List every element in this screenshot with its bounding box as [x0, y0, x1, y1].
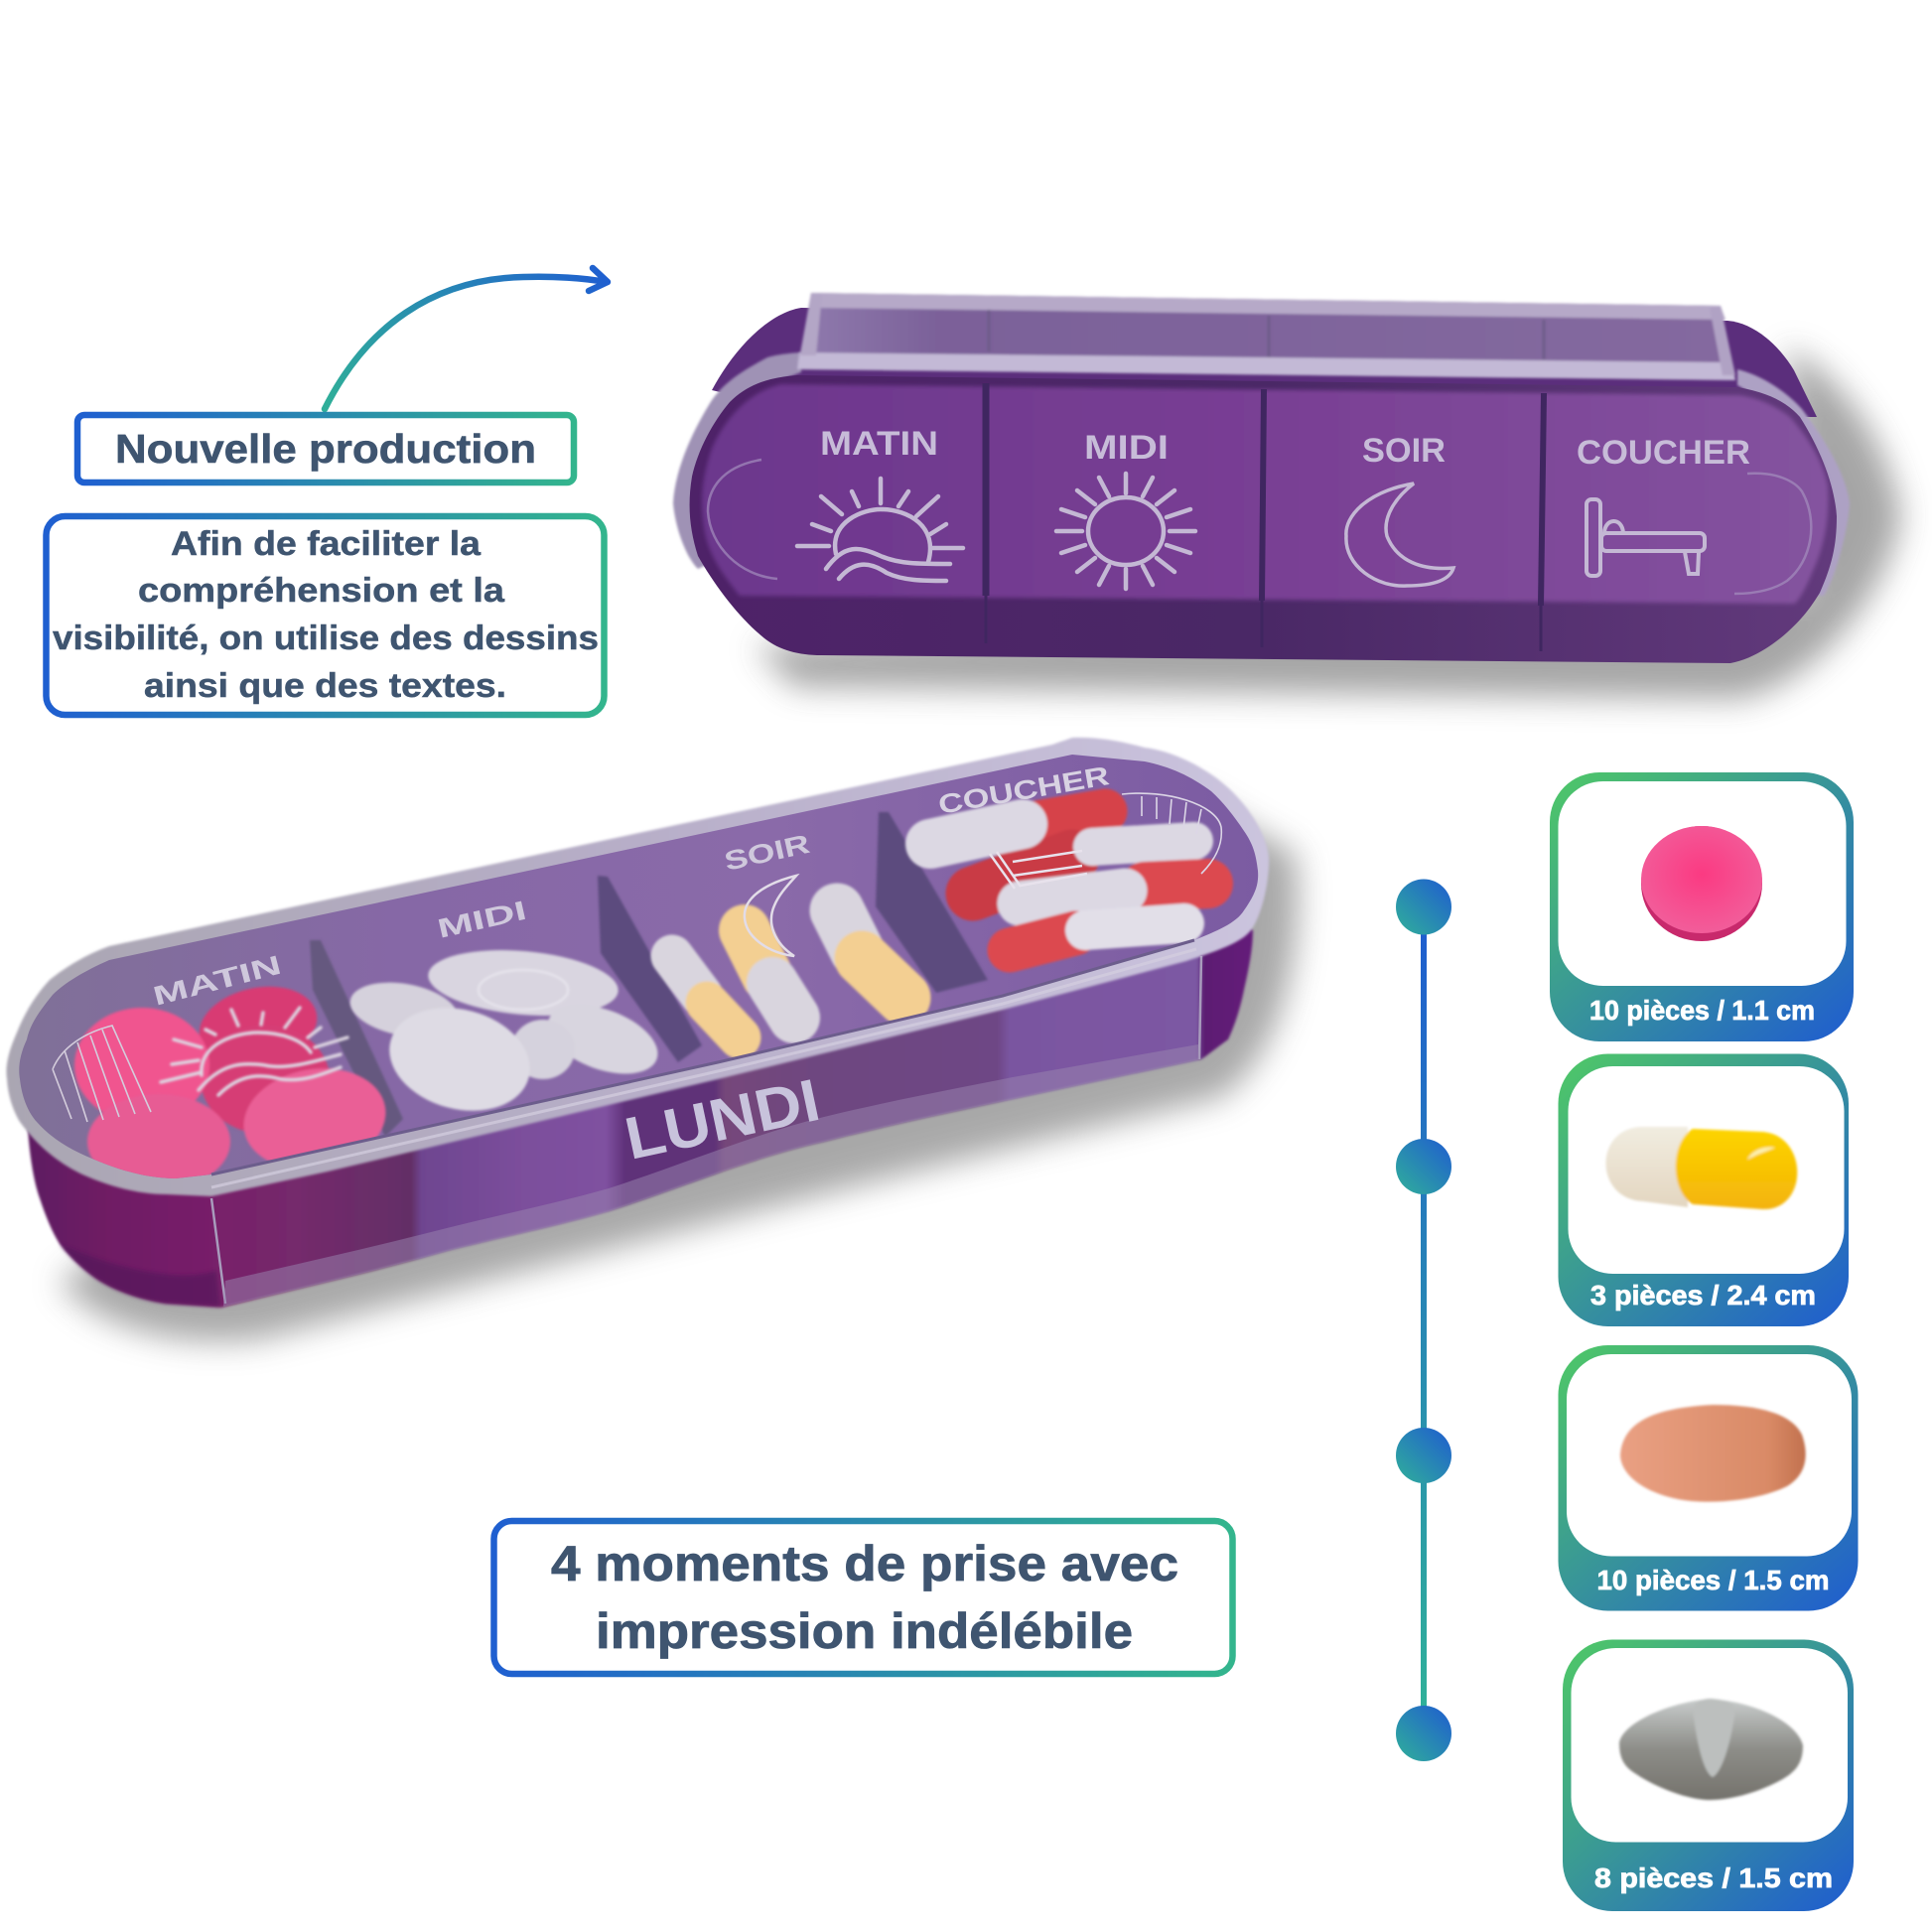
product photo: closed pill organizer: [673, 293, 1901, 699]
comb hatching right: [1122, 793, 1221, 874]
right rim: [1737, 369, 1850, 596]
yellow and white capsules: [672, 910, 903, 1037]
icon: bed: [1587, 499, 1705, 576]
pink tablet image: [1641, 826, 1762, 941]
lid lip highlight: [211, 949, 1196, 1187]
caption: 8 pièces / 1.5 cm: [1594, 1863, 1833, 1893]
capsule image: [1606, 1127, 1797, 1209]
callout: explanation text: visibilité, on utilise des dessins: [53, 620, 599, 657]
inner lid arcs: [708, 460, 1811, 594]
comb hatching left: [53, 1026, 151, 1122]
callout: explanation text: [46, 516, 604, 715]
pink tablets: [73, 985, 387, 1178]
clear front panel edges: [211, 956, 1201, 1304]
label: SOIR: SOIR: [1362, 432, 1446, 470]
timeline: [1396, 880, 1451, 1761]
callout: Nouvelle production: Nouvelle production: [115, 426, 536, 472]
callout: explanation text: ainsi que des textes.: [144, 667, 506, 705]
callout: explanation text: Afin de faciliter la: [171, 525, 482, 563]
label: MIDI: MIDI: [1084, 429, 1169, 467]
printed bed icon on lid: [990, 851, 1087, 889]
translucent lid flap: [797, 293, 1735, 380]
compartment dividers: [986, 383, 1544, 651]
orange tablet image: [1620, 1405, 1806, 1502]
lid label: MIDI: MIDI: [435, 896, 529, 944]
front compartments panel: [702, 384, 1828, 604]
card: pink tablet: [1550, 772, 1854, 1041]
lid front inner line: [211, 940, 1194, 1174]
front label: LUNDI: LUNDI: [620, 1066, 825, 1173]
timeline dot 4: [1396, 1706, 1451, 1761]
label: MATIN: MATIN: [820, 425, 938, 463]
callout: 4 moments de prise: 4 moments de prise avec: [551, 1536, 1178, 1591]
icon: sunrise: [797, 479, 963, 581]
callout: Nouvelle production: [77, 415, 574, 483]
caption: 10 pièces / 1.1 cm: [1589, 995, 1815, 1026]
left rim: [673, 352, 801, 569]
icon: moon: [1346, 483, 1453, 586]
lid rim outer: [6, 738, 1269, 1196]
organizer back body: [712, 308, 1817, 417]
arrow: curved pointer to the lid: [325, 268, 608, 409]
front dark body: [690, 375, 1837, 663]
compartment dividers: [310, 812, 988, 1137]
lid label: SOIR: SOIR: [722, 829, 812, 877]
timeline dot 1: [1396, 880, 1451, 935]
product photo: open pill organizer with pills: [6, 738, 1298, 1341]
grey tablet image: [1619, 1699, 1803, 1800]
timeline dot 2: [1396, 1139, 1451, 1194]
label: COUCHER: COUCHER: [1577, 434, 1750, 472]
lid label: MATIN: MATIN: [150, 950, 284, 1012]
printed moon icon on lid: [745, 876, 796, 956]
card: grey tablet: [1563, 1640, 1854, 1911]
card: orange tablet: [1559, 1345, 1859, 1610]
lid label: COUCHER: COUCHER: [936, 760, 1111, 820]
clear bottom strip: [223, 1044, 1199, 1307]
white oval tablets: [348, 949, 659, 1112]
card: yellow capsule: [1559, 1054, 1849, 1326]
caption: 3 pièces / 2.4 cm: [1590, 1280, 1816, 1311]
caption: 10 pièces / 1.5 cm: [1596, 1565, 1829, 1595]
callout: 4 moments de prise: [494, 1521, 1233, 1674]
lid floor: [19, 755, 1258, 1178]
timeline dot 3: [1396, 1428, 1451, 1483]
callout: 4 moments de prise: impression indélébile: [596, 1603, 1133, 1659]
icon: sun: [1056, 474, 1195, 589]
printed sun icon on lid: [161, 1008, 347, 1095]
callout: explanation text: compréhension et la: [138, 572, 505, 610]
tray left cap shading: [60, 1244, 220, 1307]
red and white capsules: [930, 811, 1208, 950]
tray body: [28, 894, 1253, 1308]
